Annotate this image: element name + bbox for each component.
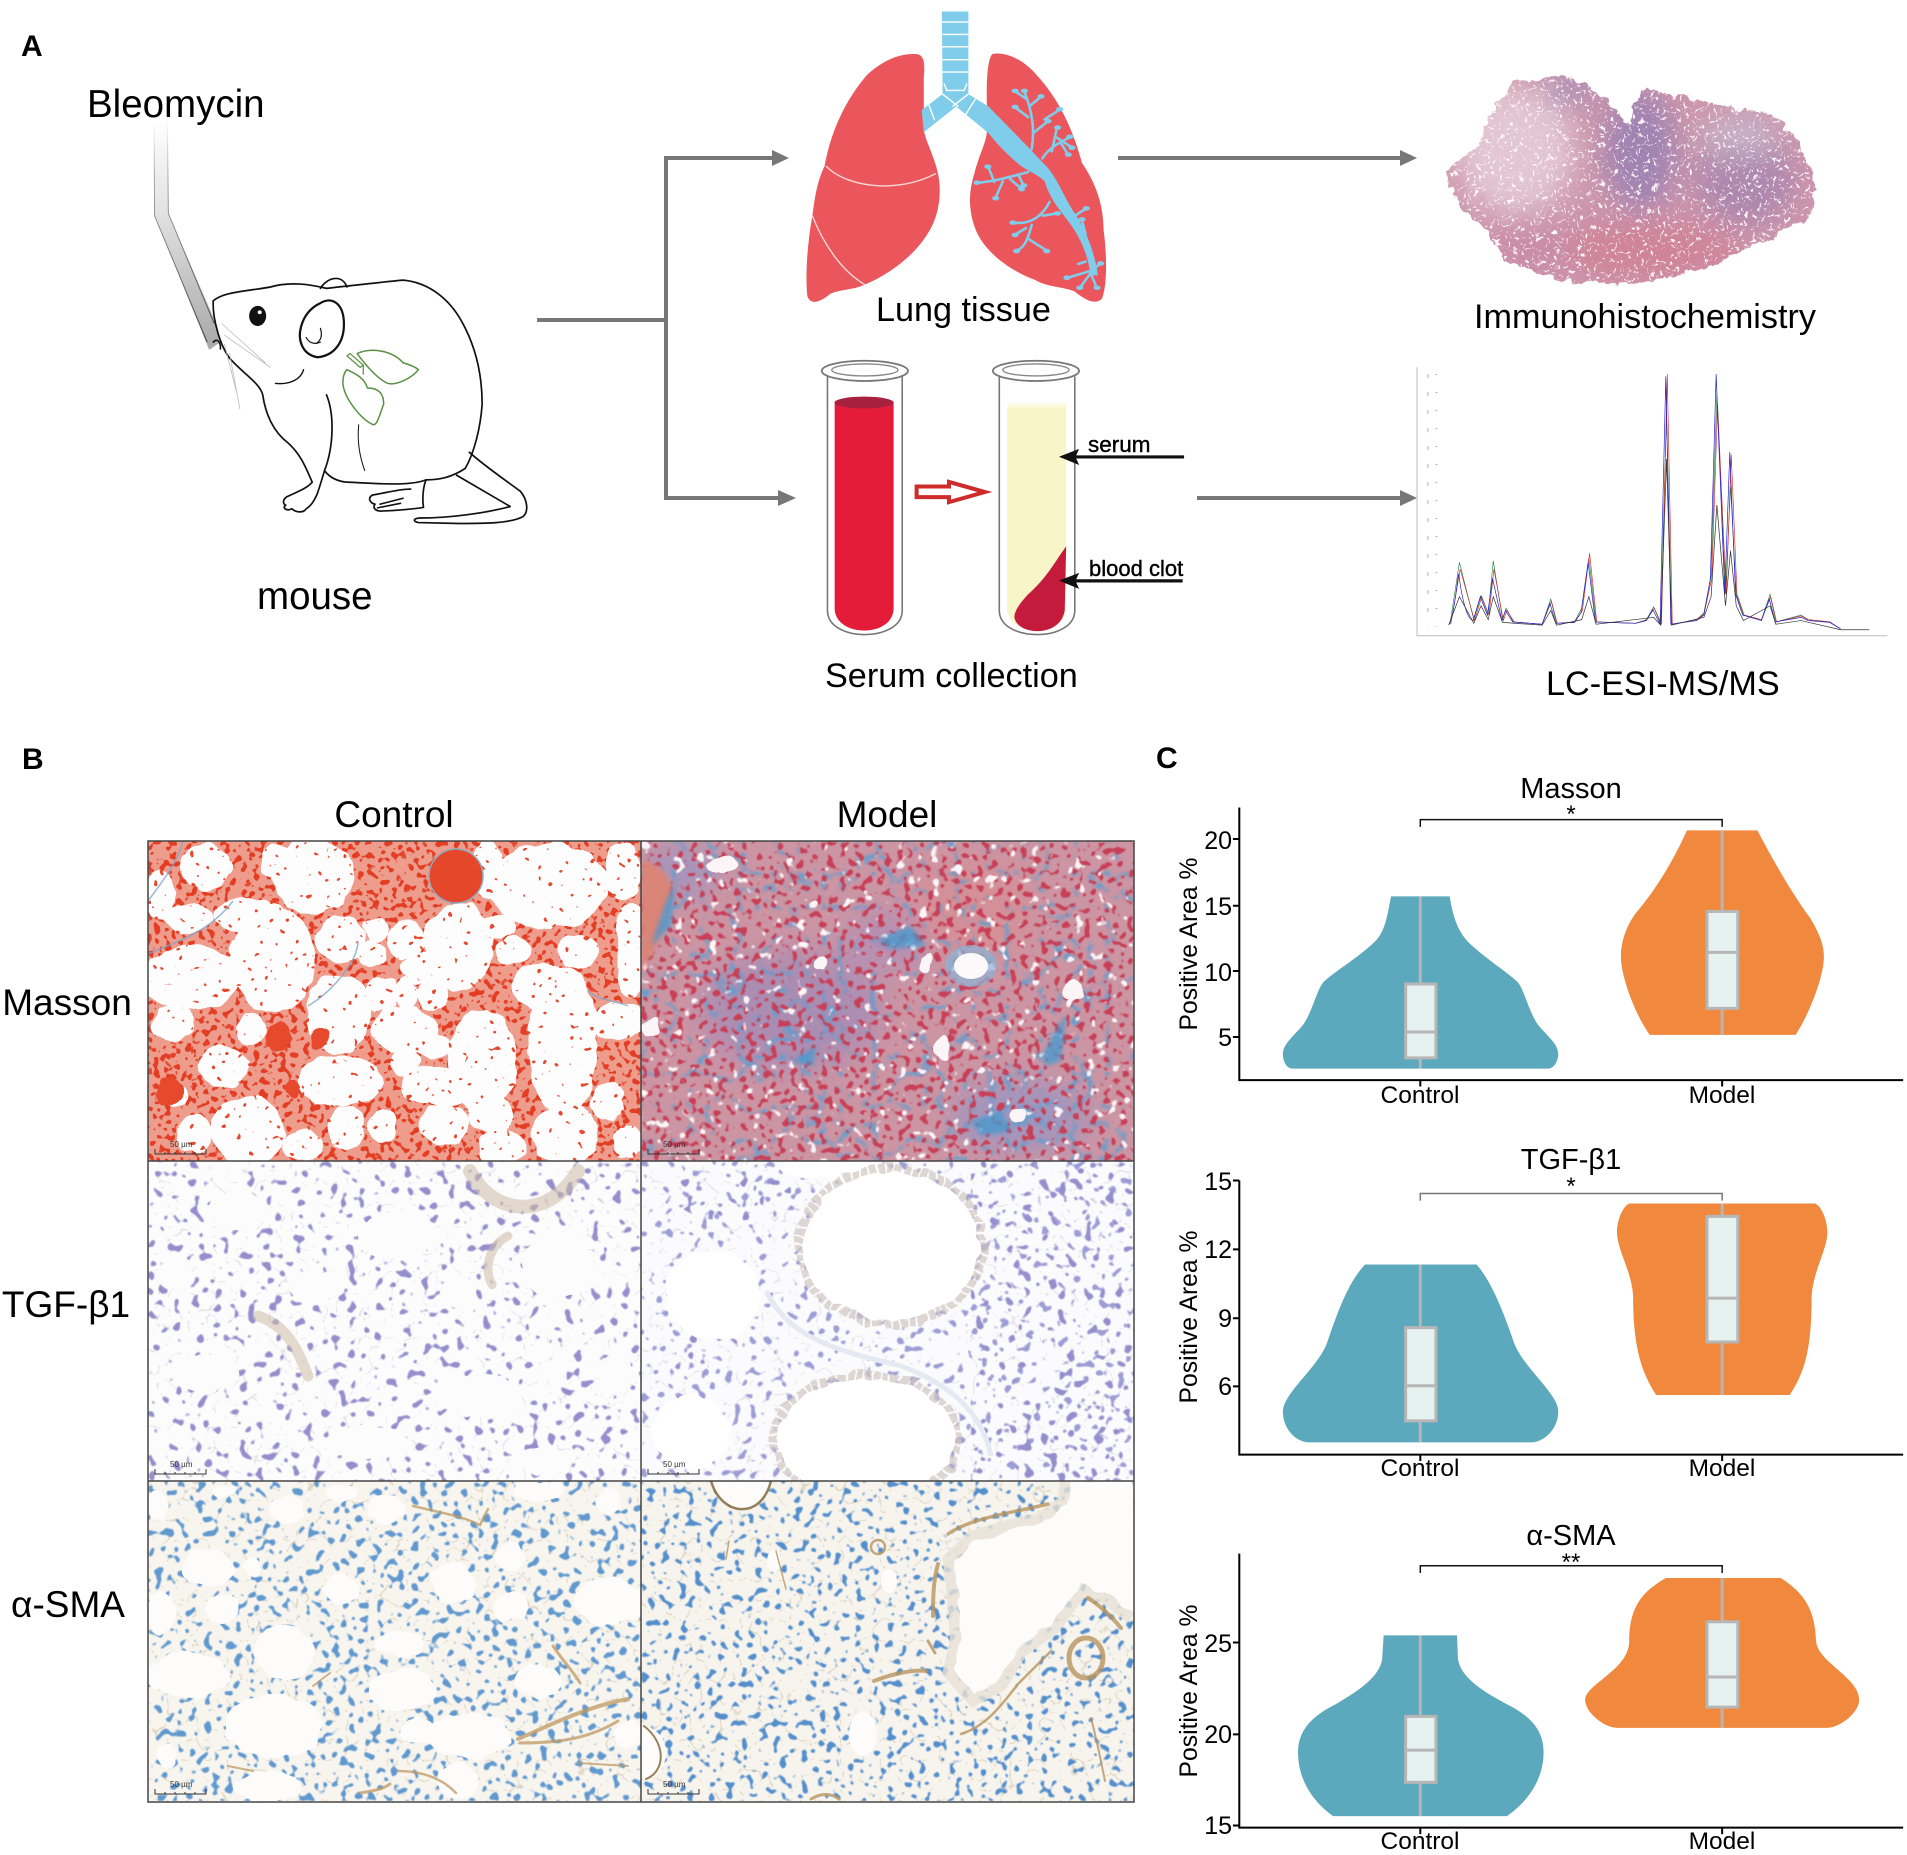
brown α-SMA staining [228,1506,628,1793]
label: LC-ESI-MS/MS: LC-ESI-MS/MS [1546,665,1780,703]
label: mouse: mouse [257,575,373,618]
y-axis ticks: 15 [1204,1812,1232,1840]
scale bar [648,1140,699,1154]
scale bar: 50 µm [663,1460,686,1469]
label: Bleomycin: Bleomycin [87,83,265,126]
bronchiole epithelium [774,1168,983,1503]
airway lumen [954,1481,1134,1694]
arrow: serum to LC-MS [1197,490,1417,506]
y-axis ticks: 20 [1204,1721,1232,1749]
scale bar: 50 µm [170,1460,193,1469]
y-axis ticks: 9 [1218,1305,1232,1333]
micrograph: α-SMA control [148,1482,640,1801]
grid frame [148,841,1134,1802]
boxplots [1406,1578,1738,1816]
panel letter A: A [21,30,43,63]
scale bar: 50 µm [170,1140,193,1149]
label: serum: serum [1088,432,1151,457]
panel B: histology grid [2,743,1134,1802]
micrograph: Masson model [642,842,1134,1160]
chart title: TGF-β1 [1521,1144,1621,1176]
plot body [1233,807,1903,1087]
boxplots [1406,1203,1738,1442]
column header: Model: Model [837,794,937,835]
x labels: Control [1381,1828,1459,1855]
chart title: α-SMA [1526,1520,1616,1552]
significance star: * [1566,1173,1576,1200]
chart: α-SMA violin [1176,1520,1903,1855]
y-axis ticks: 6 [1218,1373,1232,1401]
x labels: Control [1381,1082,1459,1109]
x labels: Model [1689,1828,1755,1855]
scale bar [648,1460,699,1474]
x labels [1381,1828,1755,1855]
violin: model [1621,830,1824,1035]
y-axis ticks: 12 [1204,1236,1232,1264]
x labels: Model [1689,1455,1755,1482]
arrow: split from mouse to lung and serum [537,150,796,506]
y-axis ticks: 25 [1204,1630,1232,1658]
column header: Control: Control [334,794,454,835]
x labels [1381,1455,1755,1482]
tube: clotted blood with serum [993,361,1079,635]
micrograph: TGF-β1 model [642,1162,1134,1480]
boxplots [1406,830,1738,1069]
chart title: Masson [1520,773,1622,805]
alveolar space [945,945,997,987]
y-axis label: Positive Area % [1176,1605,1203,1777]
scale bar: 50 µm [663,1140,686,1149]
y-axis ticks [1204,1168,1232,1401]
row label: TGF-β1: TGF-β1 [2,1284,130,1325]
x labels [1381,1082,1755,1109]
y-axis label: Positive Area % [1176,1231,1203,1403]
epithelium zone [954,1481,1134,1694]
chart: chromatogram [1417,367,1887,636]
arrow: blood clot pointer [1059,573,1183,589]
micrograph: TGF-β1 control [148,1162,640,1480]
arrow: lung to immunohistochemistry [1118,150,1417,166]
label: Serum collection: Serum collection [825,657,1078,695]
x labels: Control [1381,1455,1459,1482]
plot body [1233,1181,1903,1461]
scale bar [155,1140,206,1154]
scale bar [155,1780,206,1794]
significance stars: ** [1562,1549,1580,1576]
arrow: serum pointer [1059,449,1184,465]
y-axis ticks: 15 [1204,893,1232,921]
y-axis ticks [1204,827,1232,1052]
chart: Masson violin [1176,773,1903,1109]
violin: model [1617,1203,1827,1395]
plot body [1233,1554,1903,1834]
vessel with red cells [429,849,483,903]
panel C: violin plots [1156,742,1903,1855]
y-axis ticks: 20 [1204,827,1232,855]
scale bar: 50 µm [170,1780,193,1789]
row label: α-SMA: α-SMA [11,1584,125,1625]
label: blood clot: blood clot [1089,556,1183,581]
epithelial brown rim [258,1171,578,1376]
icon: mouse line drawing [213,278,527,523]
significance star: * [1566,801,1576,828]
violin: control [1283,896,1558,1069]
label: Lung tissue: Lung tissue [876,291,1051,329]
icon: gavage tube [154,120,220,350]
chart: TGF-β1 violin [1176,1144,1903,1482]
y-axis ticks: 10 [1204,959,1232,987]
label: Immunohistochemistry: Immunohistochemistry [1474,298,1817,336]
row label: Masson: Masson [2,982,132,1023]
arrow: red outlined [917,482,985,502]
illustration: blood tubes and serum separation [822,361,1184,635]
y-axis ticks: 15 [1204,1168,1232,1196]
scale bar [648,1780,699,1794]
panel letter C: C [1156,742,1178,775]
micrograph: α-SMA model [642,1482,1134,1801]
violin: control [1298,1635,1544,1816]
y-axis ticks [1204,1630,1232,1840]
y-axis label: Positive Area % [1176,858,1203,1030]
brown α-SMA staining [644,1481,1121,1799]
y-axis ticks: 5 [1218,1024,1232,1052]
icon: lungs [806,11,1106,302]
violin: model [1585,1578,1859,1728]
panel letter B: B [22,743,44,776]
x labels: Model [1689,1082,1755,1109]
panel A: experimental workflow [21,11,1887,703]
tube: whole blood [822,361,908,635]
micrograph: Masson control [148,842,640,1160]
violin: control [1283,1264,1558,1442]
image: lung tissue section [1446,74,1816,286]
scale bar: 50 µm [663,1780,686,1789]
scale bar [155,1460,206,1474]
